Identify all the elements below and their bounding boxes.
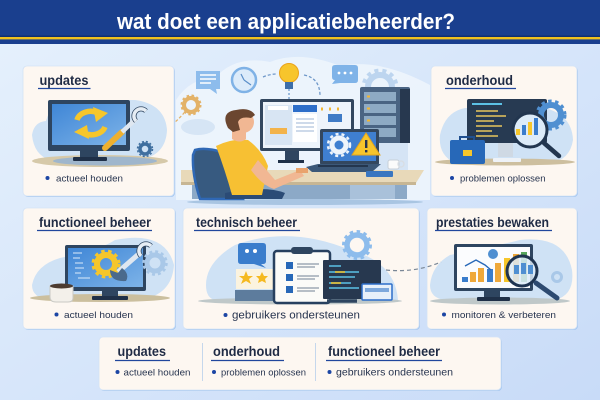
- notebook: [366, 171, 393, 177]
- icon: light bulb: [280, 64, 298, 99]
- summary: updates: [115, 343, 190, 378]
- background clouds: [176, 57, 430, 200]
- heading: functioneel beheer: functioneel beheer: [39, 214, 151, 230]
- bullet: [46, 176, 50, 180]
- main monitor: [260, 99, 354, 163]
- panel: technisch beheer: [183, 208, 420, 330]
- illustration: clipboard, stars and code screen: [198, 232, 402, 304]
- summary: functioneel beheer: [326, 343, 453, 378]
- icon: gear small orange: [182, 96, 200, 114]
- title: wat doet een applicatiebeheerder?: [116, 9, 455, 34]
- central illustration: person at desk: [168, 57, 430, 205]
- panel: summary strip: [99, 337, 502, 391]
- bullet: [442, 312, 446, 316]
- server rack: [360, 87, 410, 143]
- laptop: [306, 129, 381, 172]
- icon: warning triangle: [352, 133, 380, 155]
- arrow: dashed connector from technisch beheer to prestaties bewaken: [386, 262, 441, 271]
- panel: functioneel beheer: [23, 208, 176, 330]
- header banner: [0, 0, 600, 44]
- summary: functioneel beheer: gebruikers ondersteunen: [336, 366, 453, 378]
- bullet: [450, 176, 454, 180]
- summary: functioneel beheer: functioneel beheer: [328, 343, 440, 359]
- person: [216, 109, 308, 195]
- chair: [193, 149, 285, 199]
- heading: technisch beheer: technisch beheer: [196, 214, 297, 230]
- heading: prestaties bewaken: prestaties bewaken: [436, 214, 549, 230]
- summary: updates: actueel houden: [124, 368, 190, 378]
- text: actueel houden: [64, 310, 133, 321]
- panel: prestaties bewaken: [427, 208, 578, 330]
- panel: updates: [23, 66, 175, 197]
- illustration: chart on monitor with magnifier: [430, 239, 572, 304]
- icon: big pale gear: [364, 70, 396, 104]
- text: problemen oplossen: [460, 174, 546, 184]
- panel: onderhoud: [431, 66, 578, 197]
- coffee cup: [388, 160, 404, 169]
- icon: clock: [232, 68, 256, 92]
- illustration: monitor with refresh arrows and wrench: [32, 100, 168, 167]
- icon: chat document: [196, 71, 220, 94]
- summary: onderhoud: onderhoud: [213, 343, 280, 359]
- summary: onderhoud: [211, 343, 306, 378]
- bullet: [224, 313, 228, 317]
- bullet: [54, 312, 58, 316]
- illustration: code monitor with magnifier: [435, 99, 575, 166]
- text: gebruikers ondersteunen: [232, 310, 360, 322]
- text: actueel houden: [56, 174, 123, 184]
- text: monitoren & verbeteren: [452, 310, 556, 321]
- heading: updates: updates: [40, 72, 89, 88]
- icon: speech bubble: [332, 65, 358, 84]
- heading: onderhoud: onderhoud: [446, 72, 513, 88]
- summary: onderhoud: problemen oplossen: [221, 368, 306, 378]
- summary: updates: updates: [118, 343, 166, 359]
- illustration: monitor with gear and wrench: [30, 238, 174, 302]
- desk: [181, 170, 424, 199]
